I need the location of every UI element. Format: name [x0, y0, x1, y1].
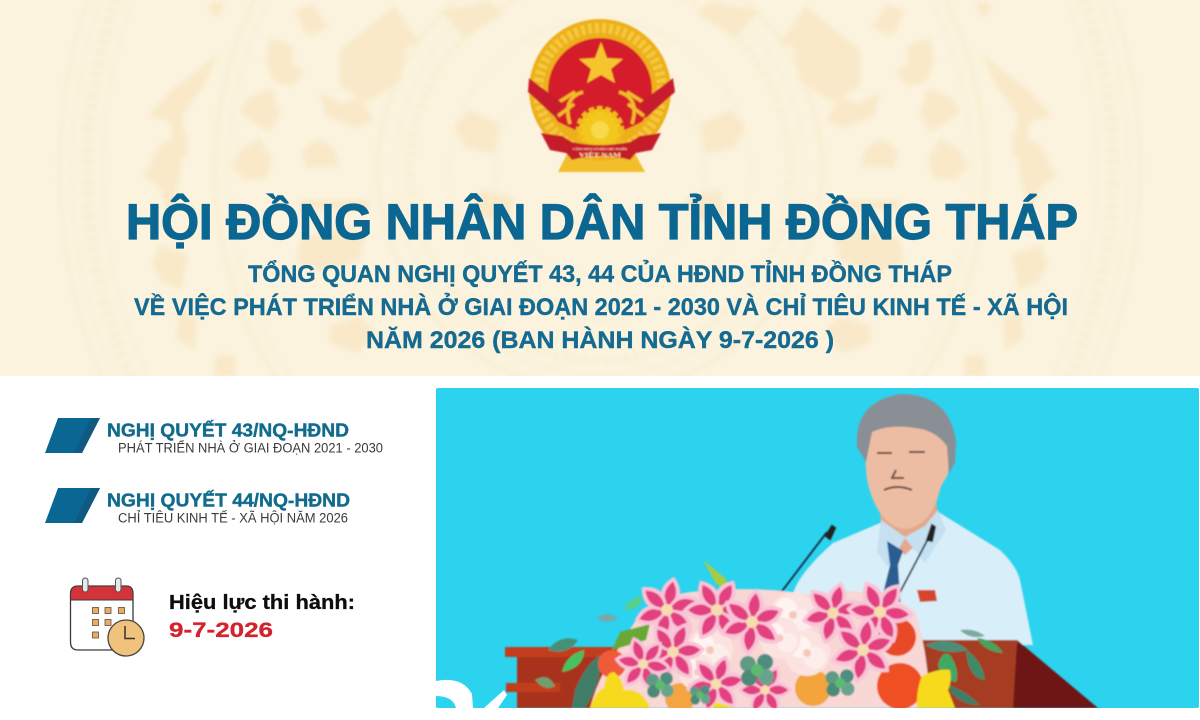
emblem bottom banner	[541, 133, 661, 160]
speaker tie	[883, 540, 904, 603]
parallelogram marker	[45, 418, 100, 453]
main title: HỘI ĐỒNG NHÂN DÂN TỈNH ĐỒNG THÁP	[126, 193, 1078, 250]
resolution 43 description: PHÁT TRIỂN NHÀ Ở GIAI ĐOẠN 2021 - 2030	[118, 440, 383, 456]
clock	[108, 620, 144, 656]
subtitle: TỔNG QUAN NGHỊ QUYẾT 43, 44 CỦA HĐND TỈNH ĐỒNG THÁP	[248, 259, 952, 288]
pink lilies	[614, 576, 914, 708]
speaker hair	[857, 394, 956, 474]
right microphone head	[927, 525, 935, 541]
subtitle: NĂM 2026 (BAN HÀNH NGÀY 9-7-2026 )	[366, 326, 834, 354]
emblem cog	[579, 109, 621, 151]
bouquet base fill	[590, 589, 930, 708]
delegate pin	[917, 590, 937, 602]
speaker neck	[880, 495, 938, 555]
effective date: 9-7-2026	[169, 619, 273, 642]
podium	[505, 640, 1098, 708]
header panel	[0, 0, 1200, 376]
speaker head	[857, 394, 956, 529]
emblem gold wheat circle	[529, 19, 671, 161]
effective date label: Hiệu lực thi hành:	[169, 592, 355, 614]
calendar page	[70, 586, 133, 650]
calendar rings	[82, 578, 121, 592]
speaker eyes, nose and mouth	[877, 452, 925, 490]
photo cyan backdrop	[436, 388, 1199, 708]
subtitle: VỀ VIỆC PHÁT TRIỂN NHÀ Ở GIAI ĐOẠN 2021 - 2030 VÀ CHỈ TIÊU KINH TẾ - XÃ HỘI	[134, 292, 1068, 321]
white backdrop graphic fragments	[436, 680, 507, 708]
left microphone head	[826, 526, 835, 539]
parallelogram marker	[45, 488, 100, 523]
bouquet leaves	[535, 560, 1003, 708]
emblem wheat sprigs	[556, 92, 646, 124]
resolution 43 heading: NGHỊ QUYẾT 43/NQ-HĐND	[107, 420, 349, 440]
emblem red field	[548, 38, 652, 130]
speaker shirt	[780, 513, 1033, 645]
emblem banner text: CỘNG HÒA XÃ HỘI CHỦ NGHĨA	[573, 146, 628, 151]
national emblem of Vietnam	[528, 19, 675, 172]
resolution 44 description: CHỈ TIÊU KINH TẾ - XÃ HỘI NĂM 2026	[118, 510, 348, 526]
resolution 43 item	[45, 418, 383, 456]
photo: speaker at podium with flowers	[436, 388, 1199, 720]
emblem base	[558, 150, 645, 172]
bronze drum watermark	[84, 0, 1116, 376]
yellow flowers	[590, 670, 955, 708]
orange and peach flowers	[598, 618, 923, 713]
emblem banner text	[573, 146, 628, 159]
left microphone	[780, 530, 828, 592]
header background	[0, 0, 1200, 376]
right microphone	[900, 540, 928, 594]
calendar date squares	[92, 608, 124, 638]
subtitle	[134, 259, 1068, 354]
resolution 44 item	[45, 488, 350, 526]
shirt collar	[877, 510, 946, 567]
emblem side ribbons	[528, 78, 675, 118]
icon: calendar with clock	[70, 578, 144, 656]
emblem banner text: VIỆT NAM	[579, 151, 621, 159]
flowers bouquet	[535, 560, 1003, 720]
emblem star	[579, 42, 623, 83]
resolution 44 heading: NGHỊ QUYẾT 44/NQ-HĐND	[107, 490, 350, 510]
white peonies	[679, 592, 830, 690]
calendar red header	[70, 586, 133, 600]
eucalyptus clusters	[646, 654, 854, 705]
emblem wheat texture	[538, 28, 662, 152]
